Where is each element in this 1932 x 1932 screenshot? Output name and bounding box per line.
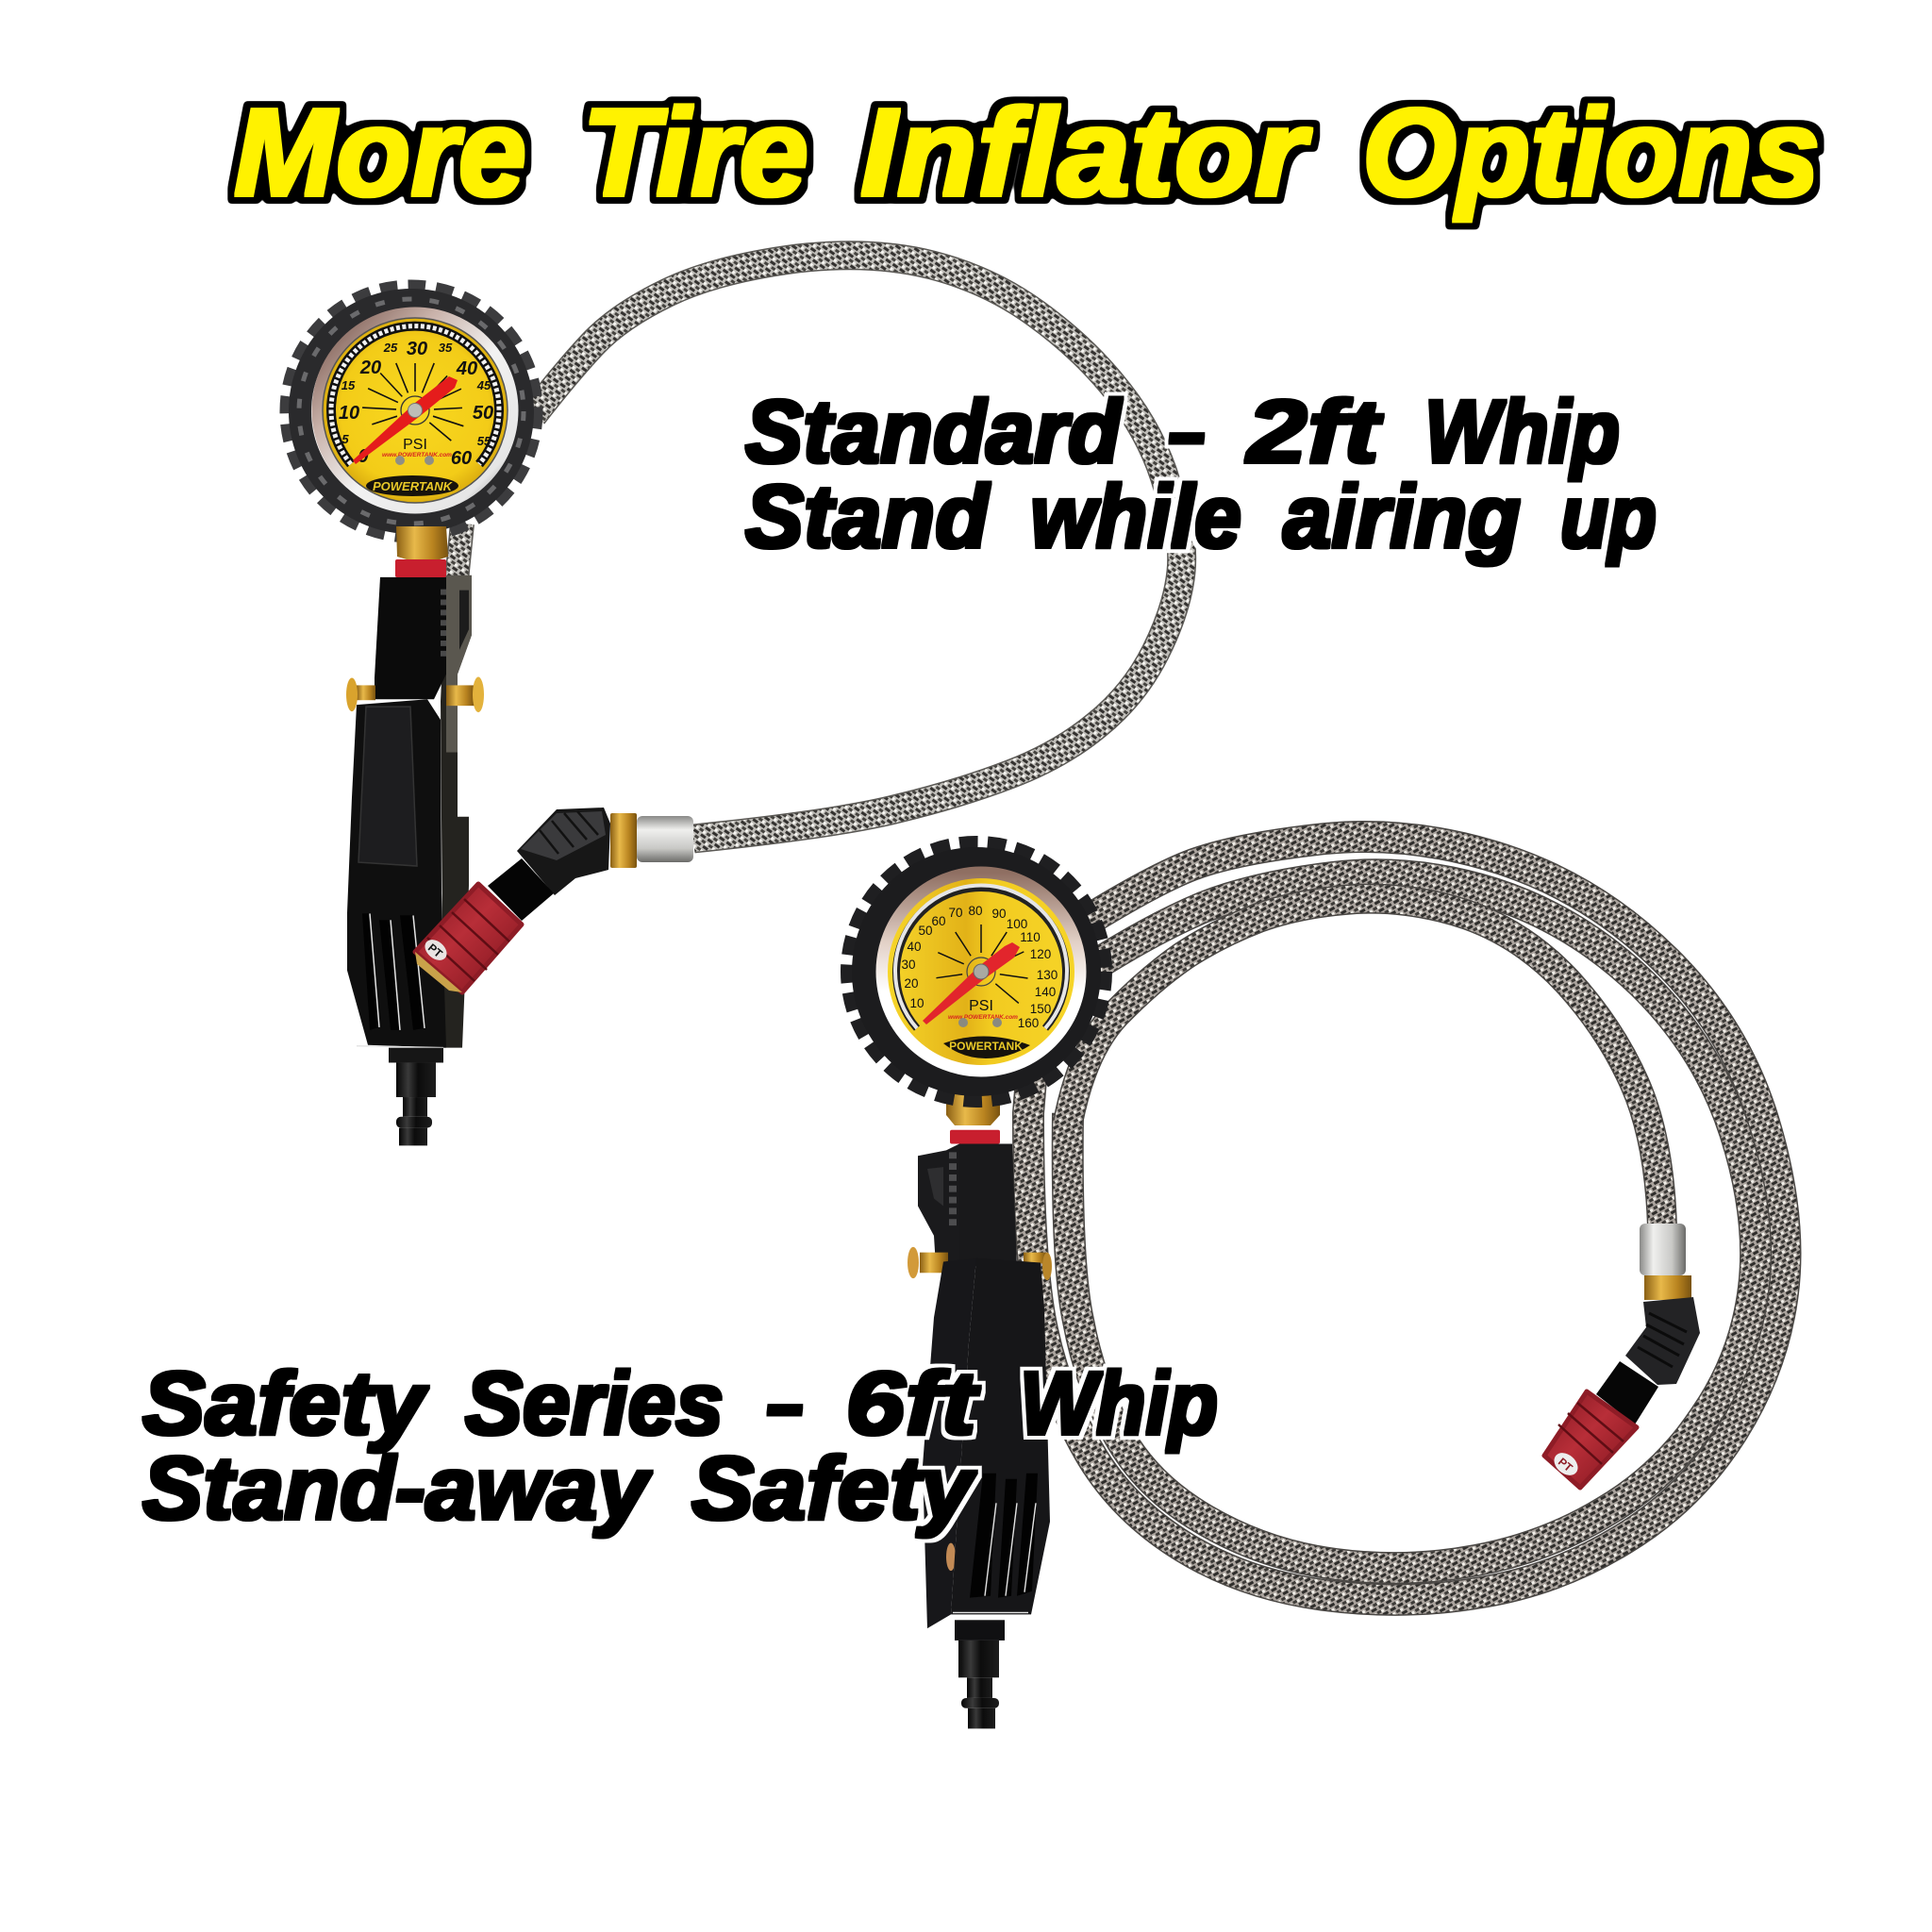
grip slots: [357, 913, 443, 1048]
handle: safety series body: [908, 1130, 1052, 1728]
upper body: [375, 577, 446, 699]
right brass pin: [446, 677, 484, 712]
red needle: [923, 942, 1020, 1024]
label: safety series 6ft whip: 6ft: [845, 1354, 980, 1454]
dial numbers: 90: [991, 907, 1007, 921]
chuck: second red coupler: [1544, 1224, 1700, 1488]
air plug: [389, 1048, 443, 1145]
dial numbers: 60: [931, 914, 946, 928]
red needle: [353, 376, 458, 464]
label: standard 2ft whip: Standard: [745, 382, 1123, 482]
dial numbers: 0: [358, 446, 369, 467]
label: safety series 6ft whip: Stand-away: [142, 1439, 652, 1539]
dial numbers: 110: [1020, 930, 1041, 944]
hose: 2ft braided whip: [457, 256, 1182, 839]
dial numbers: 10: [909, 996, 924, 1010]
screws: [395, 456, 434, 465]
yellow dial face: [888, 878, 1074, 1065]
standard inflator with 2ft whip: [289, 256, 1182, 1145]
title: [234, 83, 1820, 222]
label: standard 2ft whip: [745, 382, 1657, 567]
dial numbers: 50: [473, 403, 493, 424]
dial numbers: 100: [1007, 917, 1027, 931]
logo: [366, 475, 458, 496]
label: standard 2ft whip: –: [1169, 382, 1205, 482]
label: safety series 6ft whip: Whip: [1020, 1354, 1218, 1454]
dial numbers: 80: [968, 904, 983, 918]
label: safety series 6ft whip: –: [767, 1354, 803, 1454]
logo: POWERTANK: [373, 479, 454, 493]
title: Tire: [582, 83, 808, 222]
screws: [958, 1018, 1002, 1027]
radial lines: [362, 363, 463, 441]
hub: [967, 958, 995, 986]
dial numbers: 20: [359, 358, 381, 378]
side frame: [918, 1143, 959, 1266]
air plug: [955, 1620, 1005, 1728]
label: standard 2ft whip: 2ft: [1245, 382, 1383, 482]
dial numbers: 30: [901, 958, 916, 972]
grip slots: [953, 1474, 1038, 1612]
label: standard 2ft whip: up: [1560, 467, 1657, 567]
label: safety series 6ft whip: [142, 1354, 1218, 1539]
dial numbers: 160: [1018, 1016, 1039, 1030]
chrome ring: [882, 873, 1080, 1071]
side frame: [441, 575, 472, 1048]
dial numbers: 50: [918, 924, 933, 938]
yellow dial face: [323, 318, 508, 503]
dial numbers: 120: [1030, 947, 1051, 961]
label: safety series 6ft whip: Safety: [142, 1354, 428, 1454]
gauge: 0 to 60 PSI: [289, 289, 534, 534]
dial numbers: 15: [341, 378, 356, 392]
dial numbers: 130: [1037, 968, 1058, 982]
url: www.POWERTANK.com: [948, 1014, 1018, 1021]
dial numbers: 150: [1030, 1002, 1051, 1016]
hub: [401, 396, 429, 425]
dial numbers: 40: [907, 940, 922, 954]
radial lines: [936, 924, 1028, 1003]
dial numbers: 40: [456, 358, 477, 379]
chuck: second red coupler: PT: [1556, 1455, 1575, 1474]
label: safety series 6ft whip: Safety: [691, 1439, 976, 1539]
dial numbers: 30: [407, 339, 427, 359]
dial numbers: 10: [339, 403, 359, 424]
left strip: [923, 1258, 976, 1628]
upper body: [959, 1143, 1017, 1266]
PSI label: PSI: [969, 998, 993, 1014]
title: More: [234, 83, 526, 222]
label: safety series 6ft whip: Series: [465, 1354, 724, 1454]
url: www.POWERTANK.com: [382, 452, 452, 458]
gauge: 0 to 160 PSI: [851, 846, 1102, 1097]
lower grip: [347, 699, 446, 1048]
PSI label: PSI: [403, 437, 427, 453]
logo: POWERTANK: [949, 1040, 1023, 1053]
dial numbers: 5: [341, 432, 349, 446]
handle: standard inflator body: [346, 575, 484, 1145]
lower grip: [951, 1258, 1050, 1614]
label: standard 2ft whip: airing: [1283, 467, 1521, 567]
dial numbers: 140: [1035, 985, 1056, 999]
label: standard 2ft whip: while: [1030, 467, 1241, 567]
rubber guard: [289, 289, 534, 534]
chuck: red coupler and elbow: PT: [425, 941, 445, 960]
scale band: [331, 326, 499, 464]
gauge stem: brass fitting: [395, 526, 448, 577]
rubber guard: [851, 846, 1102, 1097]
dial numbers: 35: [439, 341, 453, 355]
chuck: red coupler and elbow: [415, 808, 693, 992]
rear brass screw: [946, 1543, 956, 1571]
dial numbers: 70: [948, 906, 963, 920]
dial numbers: 20: [904, 976, 919, 991]
title: Inflator: [860, 83, 1312, 222]
label: standard 2ft whip: Stand: [745, 467, 991, 567]
dial numbers: 60: [451, 448, 472, 469]
label: standard 2ft whip: Whip: [1424, 382, 1620, 482]
dial numbers: 25: [383, 341, 398, 355]
safety series inflator with 6ft whip: [851, 837, 1785, 1728]
scale band: [895, 886, 1067, 1028]
dial numbers: [901, 904, 1058, 1030]
left brass pin: [346, 678, 375, 711]
gauge stem: second brass fitting: [946, 1085, 1000, 1125]
title: Options: [1362, 83, 1820, 222]
logo: [943, 1036, 1030, 1058]
dial numbers: [339, 339, 493, 469]
left brass pin: [908, 1247, 948, 1278]
right brass pin: [1024, 1253, 1052, 1280]
red collar: [950, 1130, 1000, 1143]
dial numbers: 45: [476, 378, 491, 392]
chrome ring: [317, 312, 513, 508]
hose: 6ft braided whip loops: [1028, 837, 1785, 1600]
dial numbers: 55: [477, 434, 491, 448]
